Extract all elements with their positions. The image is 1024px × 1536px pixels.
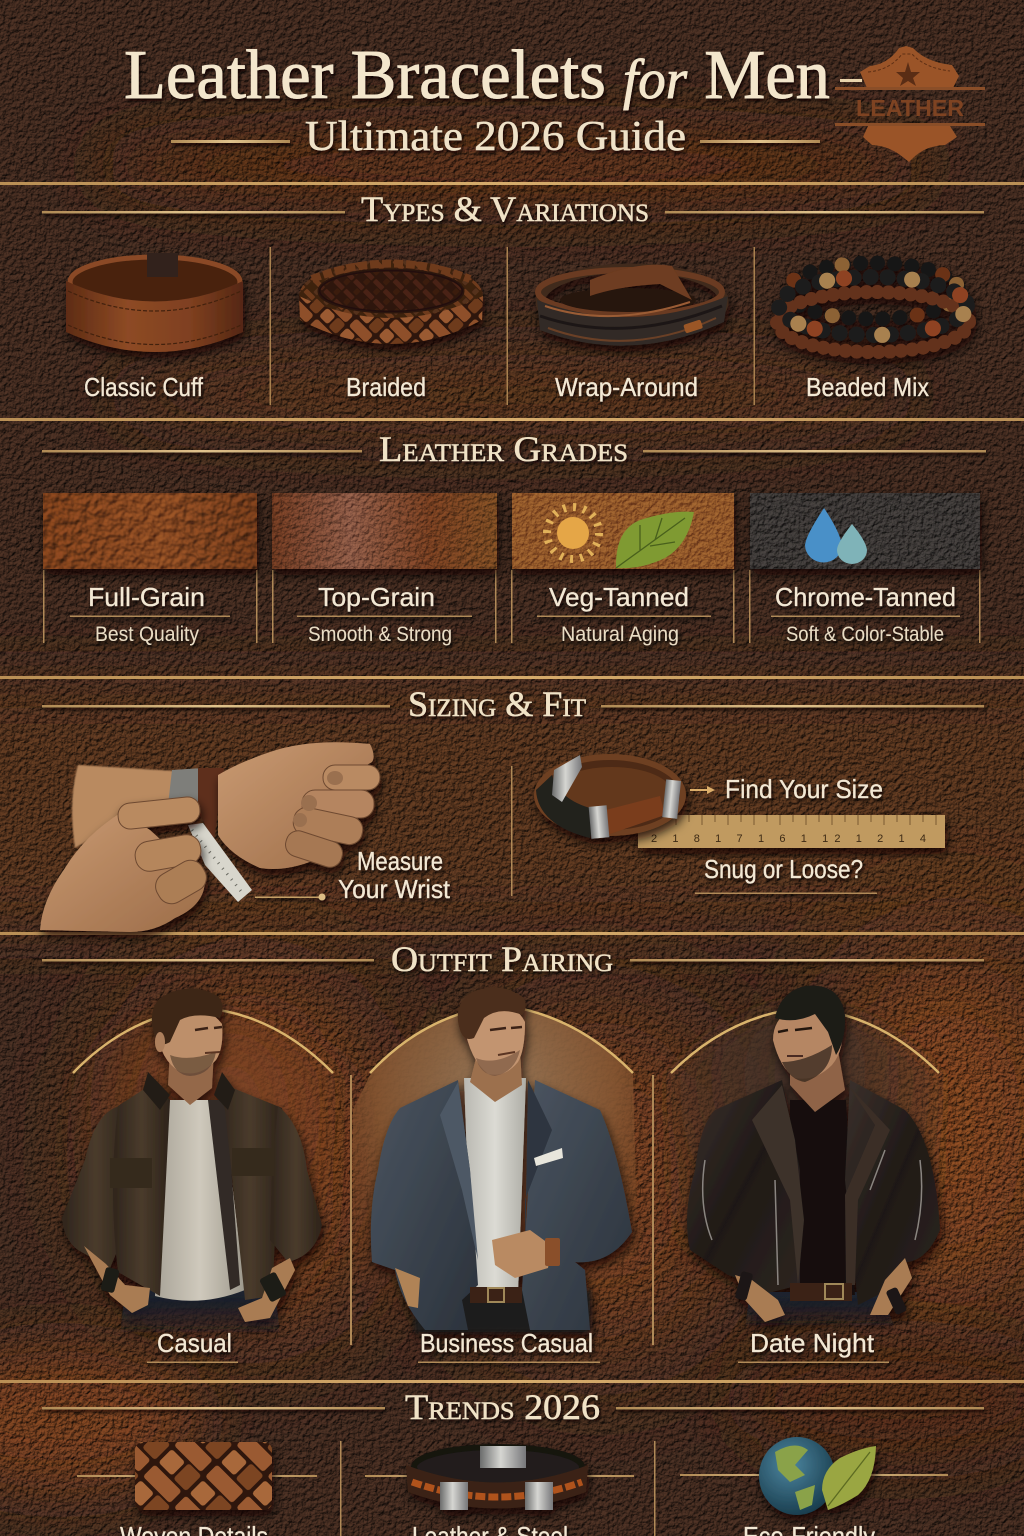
- label date: Date Night: [750, 1328, 875, 1358]
- labels: grades: Smooth & Strong: [308, 623, 452, 646]
- section rules: [0, 182, 1024, 1383]
- labels: grades: Veg-Tanned: [549, 582, 689, 612]
- labels: grades: Top-Grain: [318, 582, 435, 612]
- section: leather grades: [42, 429, 986, 646]
- section: trends 2026: [42, 1387, 984, 1536]
- person date: [687, 986, 940, 1328]
- caption: measure your wrist: Your Wrist: [338, 874, 451, 904]
- labels: types: Beaded Mix: [806, 372, 929, 402]
- labels: grades: Best Quality: [95, 623, 199, 646]
- captions: find size, snug or loose: Find Your Size: [725, 774, 883, 804]
- labels: types: Classic Cuff: [84, 372, 204, 402]
- heading: grades: Leather Grades: [379, 429, 628, 469]
- labels: grades: Chrome-Tanned: [775, 582, 956, 612]
- section: types and variations: [42, 189, 984, 405]
- arch: [671, 1008, 939, 1073]
- section: outfit pairing: [42, 939, 984, 1363]
- labels: trends: [120, 1521, 875, 1536]
- arch panel casual: [73, 1008, 333, 1340]
- labels: grades: Soft & Color-Stable: [786, 623, 944, 646]
- labels: grades: Natural Aging: [561, 623, 679, 646]
- icon: braided bracelet: [299, 260, 483, 344]
- icon: classic cuff: [66, 253, 243, 352]
- measuring hand: [40, 796, 212, 932]
- icon: leaf: [616, 512, 694, 568]
- icon: water drops: [805, 508, 867, 564]
- arch panel business: [353, 1005, 640, 1340]
- measuring tape: [188, 823, 252, 902]
- labels: types: [84, 372, 929, 402]
- dividers: [340, 1441, 656, 1536]
- icon: ruler: 2 1 8 1 7 1 6 1 12 1 2 1 4: [651, 833, 926, 845]
- heading: outfit: Outfit Pairing: [391, 939, 613, 979]
- subtitle: Ultimate 2026 Guide: [305, 114, 686, 160]
- divider: [511, 766, 512, 896]
- leather badge: [835, 46, 985, 162]
- arch: [73, 1008, 333, 1073]
- icon: globe with leaf: [759, 1437, 876, 1515]
- icon: beaded mix bracelet: [777, 263, 969, 352]
- label business: Business Casual: [420, 1328, 593, 1358]
- dividers: [270, 247, 755, 405]
- caption: measure your wrist: [255, 846, 451, 904]
- brackets: [43, 570, 980, 643]
- leather band: [168, 768, 224, 840]
- icon: steel and leather bracelet: [536, 755, 683, 839]
- figure: business casual: [353, 987, 640, 1363]
- label casual: Casual: [157, 1328, 232, 1358]
- subtitle: [171, 114, 820, 160]
- labels: grades: Full-Grain: [88, 582, 205, 612]
- leather badge: LEATHER: [856, 95, 964, 121]
- swatch: full-grain: [43, 493, 257, 569]
- caption: measure your wrist: Measure: [357, 846, 443, 876]
- icon: wrap-around bracelet: [537, 265, 728, 346]
- arch: [370, 1005, 633, 1073]
- person business: [371, 987, 632, 1332]
- person casual: [62, 988, 322, 1335]
- heading: trends: Trends 2026: [405, 1387, 600, 1427]
- section: sizing and fit: [40, 684, 984, 932]
- fist: [218, 742, 380, 870]
- swatch: top-grain: [272, 493, 497, 569]
- heading: sizing: Sizing & Fit: [408, 684, 586, 724]
- swatch: chrome-tanned with drops: [750, 493, 980, 569]
- title: Leather Bracelets for Men: [124, 37, 830, 114]
- swatch: veg-tanned with sun and leaf: [512, 493, 734, 569]
- captions: find size, snug or loose: Snug or Loose?: [704, 854, 863, 884]
- icon: leather and steel bracelet: [406, 1446, 588, 1510]
- labels: grades: [70, 582, 960, 646]
- icon: sun: [547, 507, 599, 559]
- arch panel date: [671, 1008, 939, 1340]
- figure: casual: [62, 988, 333, 1363]
- dividers: [350, 1075, 654, 1345]
- captions: find size, snug or loose: [695, 774, 883, 894]
- figure: date night: [671, 986, 940, 1363]
- labels: types: Braided: [346, 372, 426, 402]
- icon: woven details: [135, 1442, 272, 1510]
- heading: types: Types & Variations: [361, 189, 649, 229]
- labels: types: Wrap-Around: [555, 372, 698, 402]
- icon: ruler: [638, 815, 945, 848]
- illustration: hands measuring wrist: [40, 742, 380, 932]
- arrow: find your size: [690, 786, 715, 794]
- forearm: [72, 765, 175, 848]
- leader lines: [77, 1474, 948, 1477]
